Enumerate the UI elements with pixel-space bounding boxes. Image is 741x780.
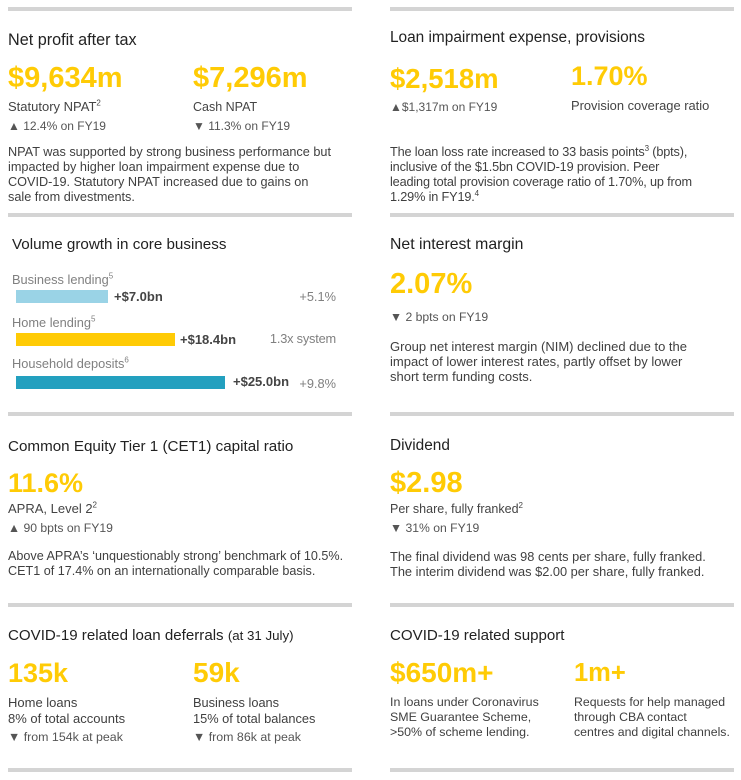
text: net interest margin commentary: impact of lower interest rates, partly offset by lower bbox=[390, 354, 682, 369]
label: business loans bbox=[193, 695, 315, 726]
label: provision coverage ratio: Provision coverage ratio bbox=[571, 98, 709, 113]
label: home loans: Home loans bbox=[8, 695, 77, 710]
statistic: SME loans value: $650m+ bbox=[390, 657, 494, 688]
heading: COVID-19 related support: COVID-19 related support bbox=[390, 627, 564, 644]
label: per share: Per share, fully franked2 bbox=[390, 501, 523, 516]
heading: loan impairment expense: Loan impairment expense, provisions bbox=[390, 29, 645, 46]
label: APRA level 2: APRA, Level 22 bbox=[8, 501, 97, 516]
label: home loans: 8% of total accounts bbox=[8, 711, 125, 726]
label: household deposits: Household deposits6 bbox=[12, 356, 129, 371]
statistic: provision coverage value: 1.70% bbox=[571, 61, 648, 91]
text: CET1 commentary bbox=[8, 549, 343, 578]
label: statutory NPAT: Statutory NPAT2 bbox=[8, 99, 101, 114]
panel: COVID-19 loan deferrals bbox=[8, 627, 315, 744]
panel: CET1 capital ratio bbox=[8, 438, 343, 578]
label: business lending: Business lending5 bbox=[12, 272, 113, 287]
text: requests for help: through CBA contact bbox=[574, 710, 687, 724]
label: business loans: 15% of total balances bbox=[193, 711, 315, 726]
panel: COVID-19 related support bbox=[390, 627, 730, 739]
bar: household deposits bbox=[16, 376, 225, 389]
text: net interest margin commentary bbox=[390, 339, 687, 384]
heading: volume growth: Volume growth in core business bbox=[12, 236, 226, 253]
panel: dividend bbox=[390, 437, 706, 579]
panel: net interest margin bbox=[390, 236, 687, 384]
text: net interest margin commentary: short term funding costs. bbox=[390, 369, 532, 384]
text: net interest margin commentary: Group net interest margin (NIM) declined due to the bbox=[390, 339, 687, 354]
text: requests for help bbox=[574, 695, 730, 739]
change: home loans: ▼ from 154k at peak bbox=[8, 730, 123, 744]
note: home lending: 1.3x system bbox=[270, 331, 336, 346]
label: home loans bbox=[8, 695, 125, 726]
change: statutory NPAT: ▲ 12.4% on FY19 bbox=[8, 119, 106, 133]
text: NPAT commentary: NPAT was supported by strong business performance but bbox=[8, 145, 331, 159]
label: home lending: Home lending5 bbox=[12, 315, 95, 330]
text: SME guarantee scheme: >50% of scheme lending. bbox=[390, 725, 530, 739]
note: household deposits: +9.8% bbox=[299, 376, 336, 391]
change: CET1: ▲ 90 bpts on FY19 bbox=[8, 521, 113, 535]
statistic: requests value: 1m+ bbox=[574, 659, 626, 687]
text: dividend commentary: The interim dividend was $2.00 per share, fully franked. bbox=[390, 564, 704, 579]
label: cash NPAT: Cash NPAT bbox=[193, 100, 257, 114]
text: NPAT commentary: impacted by higher loan impairment expense due to bbox=[8, 160, 299, 174]
text: SME guarantee scheme: SME Guarantee Scheme, bbox=[390, 710, 531, 724]
value: home lending: +$18.4bn bbox=[180, 332, 236, 347]
text: NPAT commentary bbox=[8, 145, 331, 204]
text: SME guarantee scheme: In loans under Coronavirus bbox=[390, 695, 539, 709]
change: cash NPAT: ▼ 11.3% on FY19 bbox=[193, 119, 290, 133]
text: loan impairment commentary: inclusive of the $1.5bn COVID-19 provision. Peer bbox=[390, 160, 659, 174]
bar: home lending bbox=[16, 333, 175, 346]
text: SME guarantee scheme bbox=[390, 695, 539, 739]
heading: net interest margin: Net interest margin bbox=[390, 236, 523, 253]
value: household deposits: +$25.0bn bbox=[233, 374, 289, 389]
panel: volume growth bbox=[12, 236, 336, 391]
change: dividend: ▼ 31% on FY19 bbox=[390, 521, 479, 535]
change: business loans: ▼ from 86k at peak bbox=[193, 730, 301, 744]
text: dividend commentary: The final dividend was 98 cents per share, fully franked. bbox=[390, 549, 706, 564]
heading: CET1 capital ratio: Common Equity Tier 1 (CET1) capital ratio bbox=[8, 438, 293, 455]
statistic: cash NPAT value: $7,296m bbox=[193, 62, 308, 94]
text: loan impairment commentary bbox=[390, 144, 692, 204]
text: CET1 commentary: Above APRA’s ‘unquestionably strong’ benchmark of 10.5%. bbox=[8, 549, 343, 563]
statistic: home loans deferred: 135k bbox=[8, 658, 68, 688]
text: loan impairment commentary: 1.29% in FY19.4 bbox=[390, 189, 479, 204]
text: loan impairment commentary: The loan loss rate increased to 33 basis points3 (bpts), bbox=[390, 144, 687, 159]
text: requests for help: Requests for help managed bbox=[574, 695, 725, 709]
statistic: net interest margin value: 2.07% bbox=[390, 268, 472, 300]
statistic: business loans deferred: 59k bbox=[193, 657, 240, 688]
change: loan impairment: ▲$1,317m on FY19 bbox=[390, 100, 497, 114]
panel: loan impairment expense bbox=[390, 29, 709, 204]
bar: business lending bbox=[16, 290, 108, 303]
statistic: CET1 value: 11.6% bbox=[8, 468, 83, 498]
change: net interest margin: ▼ 2 bpts on FY19 bbox=[390, 310, 488, 324]
heading: COVID-19 loan deferrals: COVID-19 related loan deferrals (at 31 July) bbox=[8, 627, 294, 644]
text: CET1 commentary: CET1 of 17.4% on an internationally comparable basis. bbox=[8, 564, 315, 578]
text: requests for help: centres and digital channels. bbox=[574, 725, 730, 739]
label: business loans: Business loans bbox=[193, 695, 279, 710]
panel: net profit after tax bbox=[8, 31, 331, 204]
statistic: loan impairment value: $2,518m bbox=[390, 63, 499, 94]
text: NPAT commentary: COVID-19. Statutory NPAT increased due to gains on bbox=[8, 175, 308, 189]
statistic: dividend value: $2.98 bbox=[390, 467, 463, 499]
text: dividend commentary bbox=[390, 549, 706, 579]
heading: dividend: Dividend bbox=[390, 437, 450, 454]
heading: net profit after tax: Net profit after tax bbox=[8, 31, 137, 49]
note: business lending: +5.1% bbox=[299, 289, 336, 304]
text: loan impairment commentary: leading total provision coverage ratio of 1.70%, up from bbox=[390, 175, 692, 189]
text: NPAT commentary: sale from divestments. bbox=[8, 190, 135, 204]
value: business lending: +$7.0bn bbox=[114, 289, 163, 304]
statistic: statutory NPAT value: $9,634m bbox=[8, 62, 122, 94]
